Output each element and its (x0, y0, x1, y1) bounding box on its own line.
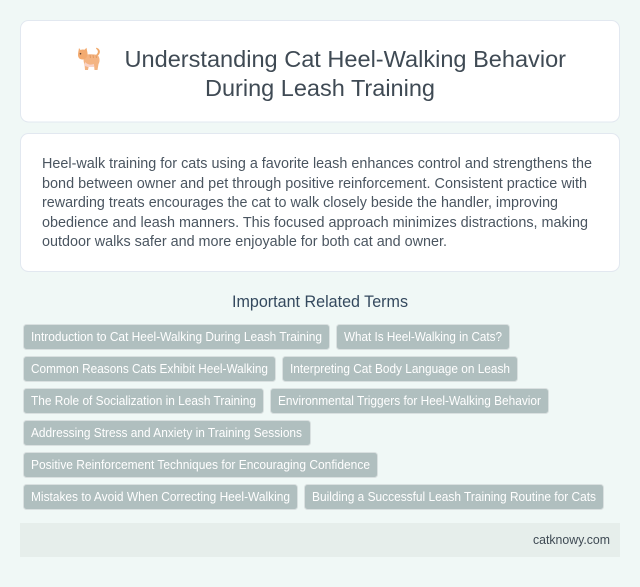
text block: description: Heel-walk training for cats using a favorite leash enhances control and strengthens the (42, 156, 592, 172)
tag: socialization: The Role of Socialization in Leash Training (31, 394, 256, 408)
tag: mistakes (24, 484, 298, 510)
title: Understanding Cat Heel-Walking Behavior (124, 46, 566, 72)
heading: important related terms: Important Related Terms (232, 293, 408, 311)
tag: environmental triggers: Environmental Triggers for Heel-Walking Behavior (278, 394, 542, 408)
text block: description (42, 156, 592, 250)
text block: description: outdoor walks safer and more enjoyable for both cat and owner. (42, 234, 447, 250)
title (124, 46, 566, 101)
panel: header card (20, 20, 620, 122)
icon: cat (78, 48, 100, 70)
tag: stress and anxiety (24, 420, 310, 446)
panel: description text card (20, 134, 620, 272)
tag: routine (304, 484, 604, 510)
tag: mistakes: Mistakes to Avoid When Correcting Heel-Walking (31, 490, 290, 504)
tag: socialization (24, 388, 264, 414)
tag: environmental triggers (270, 388, 548, 414)
footer (20, 523, 620, 557)
tag: what is heel-walking: What Is Heel-Walking in Cats? (344, 330, 502, 344)
tag: body language (282, 356, 518, 382)
title: During Leash Training (205, 75, 435, 101)
tag: positive reinforcement (24, 452, 378, 478)
tag: body language: Interpreting Cat Body Language on Leash (290, 362, 510, 376)
text block: description: rewarding treats encourages the cat to walk closely beside the handler, improving (42, 195, 558, 211)
tag: what is heel-walking (336, 324, 510, 350)
text block: description: bond between owner and pet through positive reinforcement. Consistent practice with (42, 176, 587, 192)
tag: introduction (24, 324, 330, 350)
tag: common reasons: Common Reasons Cats Exhibit Heel-Walking (31, 362, 268, 376)
footer source text: catknowy.com (533, 533, 610, 547)
panel: related term tags (24, 324, 604, 510)
text block: description: obedience and leash manners. This focused approach minimizes distractions, making (42, 215, 588, 231)
tag: introduction: Introduction to Cat Heel-Walking During Leash Training (31, 330, 322, 344)
tag: common reasons (24, 356, 276, 382)
tag: stress and anxiety: Addressing Stress and Anxiety in Training Sessions (31, 426, 302, 440)
tag: positive reinforcement: Positive Reinforcement Techniques for Encouraging Confidence (31, 458, 370, 472)
tag: routine: Building a Successful Leash Training Routine for Cats (312, 490, 596, 504)
